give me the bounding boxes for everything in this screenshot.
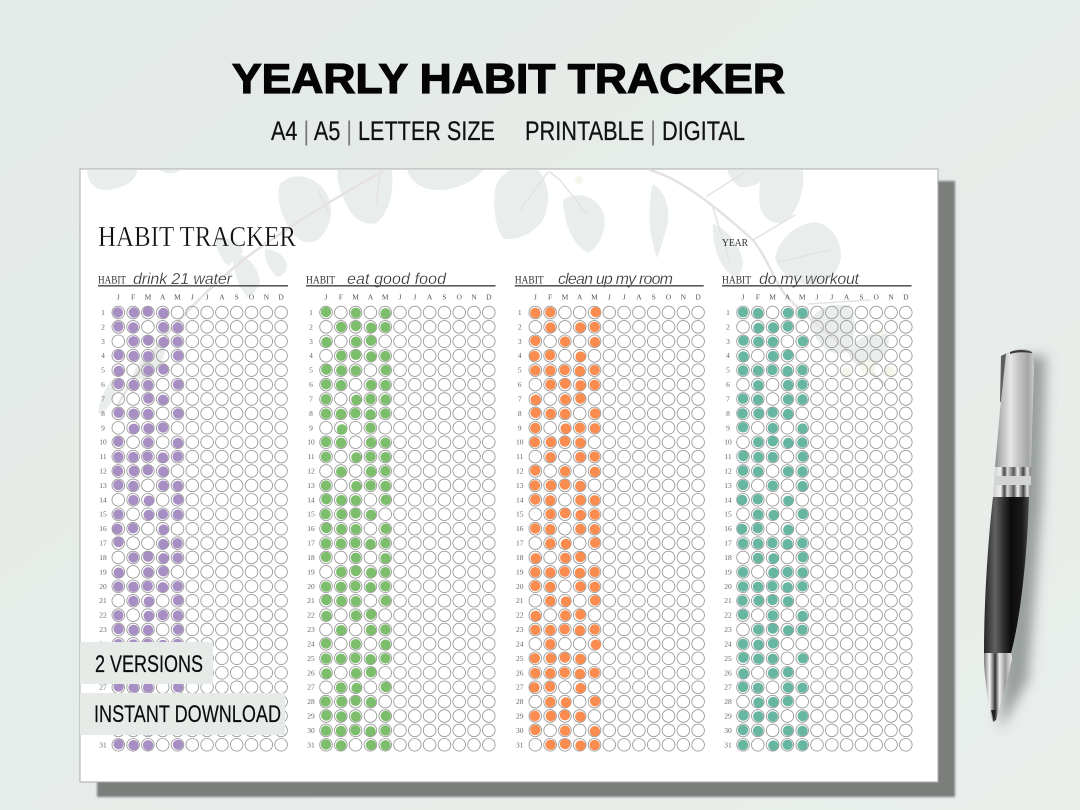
day numbers: 28 [307, 697, 315, 706]
day numbers: 3 [101, 337, 105, 346]
day numbers: 29 [516, 712, 524, 720]
day numbers: 6 [726, 380, 730, 389]
month letters: A [577, 292, 583, 302]
day numbers: 15 [99, 510, 107, 519]
badge: 2 versions: 2 VERSIONS [95, 651, 203, 678]
habit heading: drink 21 water [133, 271, 233, 288]
panel: eat good food (green) [306, 271, 496, 751]
day numbers: 10 [516, 438, 524, 447]
month letters: J [830, 292, 833, 302]
day numbers: 10 [99, 438, 107, 447]
day numbers: 16 [307, 524, 315, 533]
day numbers: 24 [724, 639, 732, 648]
month letters: S [442, 292, 446, 302]
habit heading: clean up my room [558, 271, 673, 288]
day numbers: 15 [516, 510, 524, 519]
metal band [993, 467, 1031, 497]
month letters: A [160, 292, 166, 302]
sheet heading: habit tracker: HABIT TRACKER [98, 221, 297, 253]
day numbers: 26 [516, 668, 524, 677]
day numbers: 6 [518, 380, 522, 389]
month letters: S [652, 292, 656, 302]
habit heading [98, 271, 288, 288]
badge: instant download [80, 693, 285, 735]
month letters: J [399, 292, 402, 302]
day numbers: 2 [518, 322, 522, 331]
month letters: J [623, 292, 626, 302]
month letters: S [235, 292, 239, 302]
habit heading: HABIT [306, 272, 336, 286]
subtitle: formats: PRINTABLE | DIGITAL [525, 116, 745, 146]
day numbers: 21 [724, 596, 732, 605]
day numbers: 8 [518, 409, 522, 418]
month letters [742, 292, 909, 302]
day numbers: 23 [307, 625, 315, 634]
day numbers: 1 [101, 308, 105, 317]
month letters: F [339, 292, 343, 302]
day numbers: 4 [726, 351, 730, 360]
filled teal dots [742, 312, 803, 746]
day numbers: 9 [309, 423, 313, 432]
month letters: J [191, 292, 194, 302]
day numbers [516, 308, 524, 749]
filled green dots [326, 312, 386, 745]
day numbers: 14 [724, 495, 732, 504]
day numbers: 2 [726, 322, 730, 331]
month letters: O [666, 292, 672, 302]
day numbers: 16 [99, 524, 107, 533]
month letters: N [264, 292, 270, 302]
day numbers: 31 [99, 740, 107, 749]
day numbers: 29 [724, 712, 732, 720]
month letters: J [325, 292, 328, 302]
day numbers: 11 [516, 452, 524, 461]
day numbers: 31 [516, 740, 524, 749]
day numbers: 21 [516, 596, 524, 605]
cap top edge [1010, 350, 1032, 354]
day numbers: 22 [724, 611, 732, 620]
month letters: M [562, 292, 569, 302]
day numbers: 25 [516, 654, 524, 663]
day numbers: 13 [307, 481, 315, 490]
day numbers: 17 [516, 539, 524, 548]
day numbers: 13 [99, 481, 107, 490]
day numbers: 31 [307, 740, 315, 749]
day numbers: 12 [99, 466, 107, 476]
day numbers: 17 [724, 539, 732, 548]
day numbers: 28 [516, 697, 524, 706]
day numbers: 12 [516, 466, 524, 476]
day numbers: 7 [101, 394, 105, 404]
pen cap [995, 349, 1034, 467]
empty tracking circles [320, 306, 495, 751]
day numbers: 7 [726, 394, 730, 404]
day numbers: 29 [99, 712, 107, 720]
day numbers: 5 [726, 366, 730, 375]
day numbers: 19 [516, 567, 524, 576]
day numbers: 28 [724, 697, 732, 706]
day numbers: 22 [99, 611, 107, 620]
pen barrel [984, 497, 1029, 653]
panel: clean up my room (orange) [515, 271, 704, 751]
day numbers: 21 [99, 596, 107, 605]
day numbers: 3 [309, 337, 313, 346]
month letters: J [742, 292, 745, 302]
day numbers: 25 [724, 654, 732, 663]
day numbers: 14 [516, 495, 524, 504]
empty tracking circles [112, 306, 287, 751]
day numbers: 22 [516, 611, 524, 620]
month letters: D [278, 292, 284, 302]
month letters: F [756, 292, 760, 302]
month letters: M [799, 292, 806, 302]
day numbers: 7 [309, 394, 313, 404]
day numbers: 13 [724, 481, 732, 490]
day numbers [307, 308, 315, 749]
day numbers: 19 [99, 567, 107, 576]
month letters: M [174, 292, 181, 302]
day numbers: 27 [724, 683, 732, 692]
tracker sheet [80, 169, 938, 782]
month letters: N [888, 292, 894, 302]
day numbers: 18 [307, 553, 315, 562]
day numbers: 9 [518, 423, 522, 432]
month letters: M [145, 292, 152, 302]
day numbers: 5 [309, 366, 313, 375]
badge: instant download: INSTANT DOWNLOAD [94, 701, 281, 728]
month letters [325, 292, 492, 302]
day numbers: 23 [99, 625, 107, 634]
day numbers: 2 [309, 322, 313, 331]
habit heading [515, 271, 704, 288]
month letters: D [486, 292, 492, 302]
month letters [534, 292, 701, 302]
day numbers: 26 [99, 668, 107, 677]
day numbers: 29 [307, 712, 315, 720]
day numbers: 4 [309, 351, 313, 360]
day numbers: 18 [724, 553, 732, 562]
day numbers: 4 [101, 351, 105, 360]
month letters: J [816, 292, 819, 302]
day numbers: 30 [307, 726, 315, 735]
eucalyptus leaf decoration [87, 170, 895, 414]
month letters: A [219, 292, 225, 302]
day numbers: 28 [99, 697, 107, 706]
day numbers: 14 [99, 495, 107, 504]
month letters: A [636, 292, 642, 302]
day numbers: 25 [99, 654, 107, 663]
day numbers: 5 [101, 366, 105, 375]
day numbers: 26 [724, 668, 732, 677]
pen tip [984, 653, 1012, 722]
day numbers: 21 [307, 596, 315, 605]
habit heading [306, 271, 496, 288]
day numbers: 13 [516, 481, 524, 490]
day numbers: 12 [724, 466, 732, 476]
day numbers: 20 [516, 582, 524, 591]
day numbers: 24 [307, 639, 315, 648]
day numbers: 11 [99, 452, 107, 461]
day numbers: 3 [726, 337, 730, 346]
filled orange dots [534, 312, 596, 746]
day numbers: 23 [724, 625, 732, 634]
day numbers: 16 [516, 524, 524, 533]
year label: YEAR [722, 237, 749, 249]
day numbers: 18 [99, 553, 107, 562]
day numbers: 27 [516, 683, 524, 692]
month letters: J [206, 292, 209, 302]
empty tracking circles [529, 306, 704, 751]
month letters: J [534, 292, 537, 302]
day numbers: 20 [99, 582, 107, 591]
day numbers: 24 [99, 639, 107, 648]
day numbers: 27 [307, 683, 315, 692]
day numbers: 20 [307, 582, 315, 591]
day numbers: 24 [516, 639, 524, 648]
day numbers: 10 [724, 438, 732, 447]
month letters: O [873, 292, 879, 302]
month letters: A [427, 292, 433, 302]
day numbers: 18 [516, 553, 524, 562]
pen shadow [1000, 356, 1046, 730]
day numbers: 15 [724, 510, 732, 519]
habit heading: do my workout [759, 271, 860, 288]
month letters: F [548, 292, 552, 302]
day numbers: 30 [99, 726, 107, 735]
day numbers: 11 [724, 452, 732, 461]
day numbers: 4 [518, 351, 522, 360]
day numbers: 20 [724, 582, 732, 591]
day numbers: 25 [307, 654, 315, 663]
day numbers: 8 [726, 409, 730, 418]
panel: drink water (purple) [98, 271, 288, 751]
day numbers: 8 [309, 409, 313, 418]
habit heading [722, 271, 912, 288]
day numbers: 9 [726, 423, 730, 432]
month letters: M [382, 292, 389, 302]
month letters: O [249, 292, 255, 302]
day numbers: 30 [516, 726, 524, 735]
day numbers: 8 [101, 409, 105, 418]
day numbers: 12 [307, 466, 315, 476]
day numbers: 15 [307, 510, 315, 519]
month letters: A [368, 292, 374, 302]
habit heading: HABIT [98, 272, 127, 286]
day numbers: 2 [101, 322, 105, 331]
day numbers: 19 [724, 567, 732, 576]
month letters: D [695, 292, 701, 302]
month letters: J [608, 292, 611, 302]
habit heading: eat good food [347, 271, 447, 288]
day numbers: 10 [307, 438, 315, 447]
paper drop shadow [97, 181, 955, 797]
day numbers: 30 [724, 726, 732, 735]
pen clip [1000, 353, 1007, 402]
badge: 2 versions [80, 642, 213, 684]
month letters: A [844, 292, 850, 302]
panel: do my workout (teal) [722, 271, 912, 751]
day numbers: 27 [99, 683, 107, 692]
filled purple dots [118, 312, 178, 745]
month letters: M [769, 292, 776, 302]
subtitle: sizes: A4 | A5 | LETTER SIZE [271, 116, 495, 146]
day numbers: 17 [307, 539, 315, 548]
day numbers [724, 308, 732, 749]
habit heading: HABIT [515, 272, 544, 286]
day numbers: 3 [518, 337, 522, 346]
day numbers: 26 [307, 668, 315, 677]
pen [984, 349, 1046, 730]
day numbers: 9 [101, 423, 105, 432]
day numbers: 16 [724, 524, 732, 533]
month letters: J [117, 292, 120, 302]
day numbers: 22 [307, 611, 315, 620]
day numbers: 1 [518, 308, 522, 317]
month letters: M [352, 292, 359, 302]
empty tracking circles [737, 306, 912, 751]
day numbers: 7 [518, 394, 522, 404]
day numbers: 17 [99, 539, 107, 548]
month letters: D [903, 292, 909, 302]
day numbers [99, 308, 107, 749]
main title: YEARLY HABIT TRACKER [232, 55, 785, 102]
day numbers: 5 [518, 366, 522, 375]
month letters: J [413, 292, 416, 302]
day numbers: 11 [307, 452, 315, 461]
month letters: M [591, 292, 598, 302]
month letters: A [785, 292, 791, 302]
month letters: S [859, 292, 863, 302]
day numbers: 1 [726, 308, 730, 317]
month letters: F [131, 292, 135, 302]
day numbers: 14 [307, 495, 315, 504]
month letters: O [456, 292, 462, 302]
month letters: N [471, 292, 477, 302]
month letters [117, 292, 284, 302]
month letters: N [681, 292, 687, 302]
habit heading: HABIT [722, 272, 752, 286]
day numbers: 6 [101, 380, 105, 389]
day numbers: 6 [309, 380, 313, 389]
day numbers: 23 [516, 625, 524, 634]
day numbers: 19 [307, 567, 315, 576]
day numbers: 31 [724, 740, 732, 749]
day numbers: 1 [309, 308, 313, 317]
